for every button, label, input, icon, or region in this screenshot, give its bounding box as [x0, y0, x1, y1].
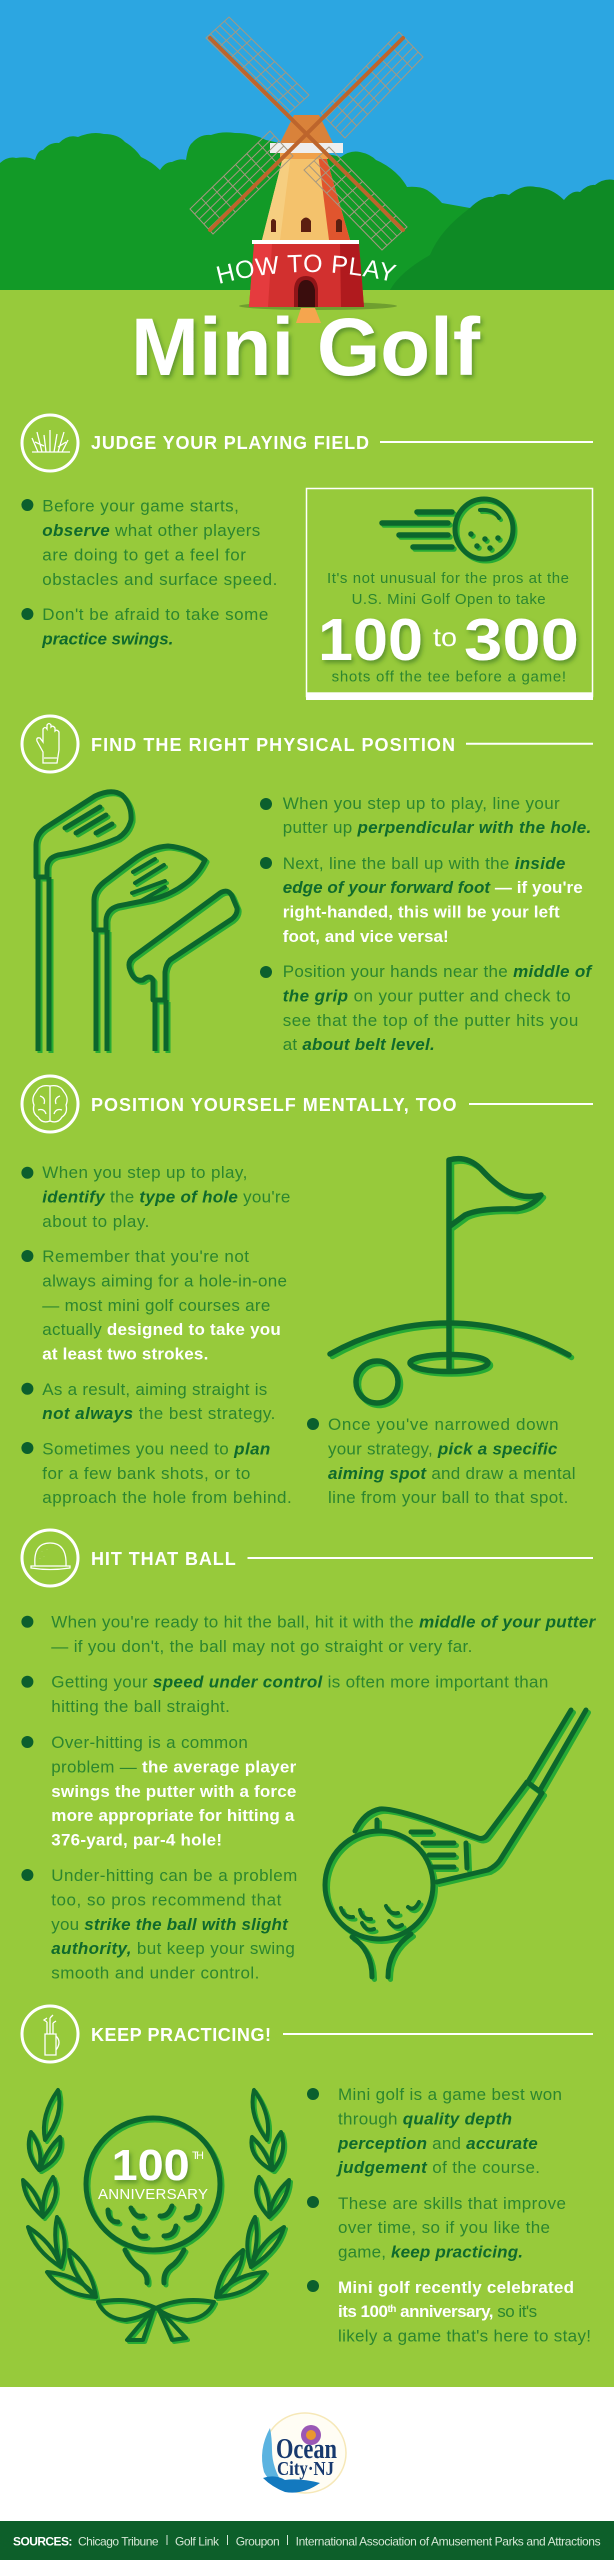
illustration: 100th anniversary wreath: ANNIVERSARY — [98, 2186, 208, 2203]
text block: Don't be afraid to take some — [42, 605, 268, 624]
text block: left: approach the hole from behind. — [42, 1488, 292, 1507]
text block: right: your strategy, pick a specific — [328, 1440, 558, 1459]
text block: — if you don't, the ball may not go straight or very far. — [51, 1637, 472, 1656]
text block — [260, 794, 594, 1054]
text block: more appropriate for hitting a — [51, 1806, 295, 1825]
text block: left: When you step up to play, — [42, 1163, 247, 1182]
icon: glove — [22, 716, 78, 772]
text block: at about belt level. — [283, 1035, 435, 1054]
icon: golf bag — [22, 2006, 78, 2062]
section 2: physical position — [22, 716, 594, 1054]
text block: left: at least two strokes. — [42, 1345, 208, 1364]
footer: sources bar: Chicago Tribune — [78, 2535, 159, 2549]
heading: POSITION YOURSELF MENTALLY, TOO — [91, 1095, 456, 1115]
illustration: three clubs — [36, 792, 239, 1053]
stat box — [306, 488, 593, 700]
text block: observe what other players — [42, 521, 260, 540]
text block: left: — most mini golf courses are — [42, 1296, 270, 1315]
text block: Position your hands near the middle of — [283, 962, 594, 981]
text block: its 100 — [338, 2302, 387, 2321]
text block: When you step up to play, line your — [283, 794, 560, 813]
illustration: club and ball on tee — [325, 1710, 588, 1980]
illustration: 100th anniversary wreath — [23, 2090, 291, 2342]
text block: Mini golf recently celebrated — [338, 2278, 574, 2297]
text block: left: about to play. — [42, 1212, 149, 1231]
text block: likely a game that's here to stay! — [338, 2327, 591, 2346]
text block: edge of your forward foot — if you're — [283, 878, 583, 897]
text block: swings the putter with a force — [51, 1782, 296, 1801]
text block: right: line from your ball to that spot. — [328, 1488, 568, 1507]
footer: sources bar: SOURCES: — [13, 2535, 72, 2549]
text block: Before your game starts, — [42, 497, 239, 516]
section 3: position mentally — [21, 1076, 593, 1507]
footer: sources bar: Groupon — [236, 2535, 280, 2549]
logo: Ocean City NJ: City·NJ — [277, 2458, 334, 2480]
ground shadow — [239, 302, 397, 310]
text block: judgement of the course. — [336, 2158, 540, 2177]
illustration: 100th anniversary wreath: TH — [192, 2150, 204, 2162]
text block — [21, 497, 277, 648]
sky — [0, 0, 614, 290]
text block: Mini golf is a game best won — [338, 2085, 562, 2104]
text block: through quality depth — [338, 2110, 512, 2129]
title: mini golf: Mini Golf — [131, 302, 481, 393]
icon: grass — [22, 415, 78, 471]
trees — [0, 132, 614, 290]
text block: the grip on your putter and check to — [283, 987, 571, 1006]
text block — [307, 2085, 591, 2346]
text block: These are skills that improve — [338, 2194, 566, 2213]
text block: over time, so if you like the — [338, 2218, 550, 2237]
header scene — [0, 0, 614, 393]
text block: left — [21, 1163, 292, 1507]
text block: th — [387, 2304, 396, 2315]
text block: Getting your speed under control is often more important than — [51, 1673, 548, 1692]
stat box: 300 — [464, 607, 579, 673]
heading: JUDGE YOUR PLAYING FIELD — [91, 433, 369, 453]
text block: Next, line the ball up with the inside — [283, 854, 565, 873]
heading: HIT THAT BALL — [91, 1549, 236, 1569]
text block: Under-hitting can be a problem — [51, 1866, 297, 1885]
illustration: 100th anniversary wreath: 100 — [112, 2141, 190, 2190]
subtitle: how to play: HOW TO PLAY — [216, 254, 397, 284]
text block: right: Once you've narrowed down — [328, 1415, 559, 1434]
text block: too, so pros recommend that — [51, 1891, 282, 1910]
text block: you strike the ball with slight — [51, 1915, 289, 1934]
icon: golf ball in motion — [382, 499, 515, 561]
text block: problem — the average player — [51, 1758, 297, 1777]
text block: Over-hitting is a common — [51, 1733, 248, 1752]
text block: right — [307, 1415, 576, 1507]
heading: FIND THE RIGHT PHYSICAL POSITION — [91, 735, 455, 755]
text block: obstacles and surface speed. — [42, 570, 277, 589]
text block: anniversary, — [396, 2302, 493, 2321]
text block: right: aiming spot and draw a mental — [328, 1464, 576, 1483]
section 1: judge your playing field — [21, 415, 593, 700]
text block: game, keep practicing. — [338, 2243, 523, 2262]
text block: foot, and vice versa! — [283, 927, 449, 946]
icon: ball on ground — [22, 1530, 78, 1586]
footer: sources bar: Golf Link — [175, 2535, 220, 2549]
text block: left: Remember that you're not — [42, 1247, 249, 1266]
text block: left: Sometimes you need to plan — [42, 1440, 270, 1459]
footer: sources bar: International Association of Amusement Parks and Attractions — [296, 2535, 601, 2549]
section 4: hit that ball — [21, 1530, 597, 1983]
text block: right-handed, this will be your left — [283, 903, 560, 922]
text block: left: actually designed to take you — [42, 1320, 281, 1339]
text block: left: identify the type of hole you're — [42, 1188, 290, 1207]
text block: authority, but keep your swing — [51, 1939, 295, 1958]
text block: 376-yard, par-4 hole! — [51, 1831, 222, 1850]
text block: left: for a few bank shots, or to — [42, 1464, 250, 1483]
text block: hitting the ball straight. — [51, 1697, 230, 1716]
text block — [21, 1613, 597, 1983]
logo: Ocean City NJ: Ocean — [276, 2434, 337, 2465]
logo: Ocean City NJ — [262, 2413, 346, 2493]
text block: smooth and under control. — [51, 1964, 259, 1983]
text block: putter up perpendicular with the hole. — [283, 818, 591, 837]
windmill — [190, 17, 423, 323]
text block: see that the top of the putter hits you — [283, 1011, 578, 1030]
stat box: to — [433, 622, 457, 652]
text block: left: not always the best strategy. — [42, 1404, 275, 1423]
section 5: keep practicing — [22, 2006, 593, 2346]
text block: are doing to get a feel for — [42, 546, 246, 564]
stat box: It's not unusual for the pros at the — [327, 570, 569, 587]
text block: left: As a result, aiming straight is — [42, 1380, 267, 1399]
footer: sources bar — [0, 2521, 614, 2560]
stat box: shots off the tee before a game! — [332, 669, 566, 686]
icon: brain — [22, 1076, 78, 1132]
text block: perception and accurate — [337, 2134, 538, 2153]
stat box: 100 — [318, 607, 423, 673]
text block: When you're ready to hit the ball, hit it with the middle of your putter — [51, 1613, 597, 1632]
text block: practice swings. — [41, 629, 173, 648]
stat box: U.S. Mini Golf Open to take — [352, 591, 546, 608]
text block: left: always aiming for a hole-in-one — [42, 1272, 287, 1291]
heading: KEEP PRACTICING! — [91, 2025, 271, 2045]
illustration: flag and hole — [330, 1159, 572, 1406]
text block: so it's — [497, 2302, 537, 2321]
footer: white logo band — [0, 2387, 614, 2521]
